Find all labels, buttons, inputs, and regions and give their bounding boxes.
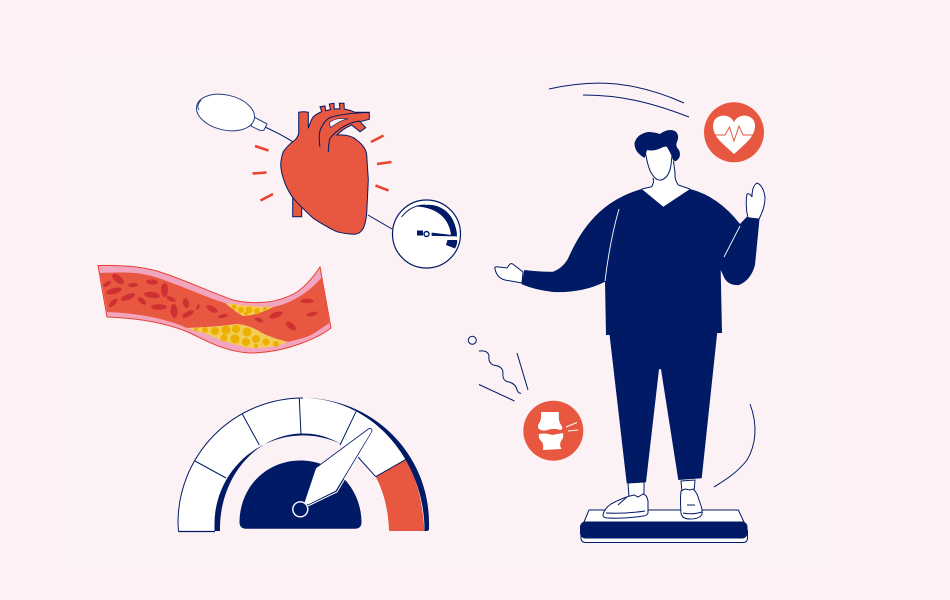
icon: heart rate badge (704, 102, 764, 162)
needle (293, 428, 372, 517)
background panel (67, 55, 833, 572)
sleeve highlights (605, 209, 619, 281)
person (495, 130, 765, 497)
trousers (609, 330, 718, 483)
motion arc near leg (714, 404, 755, 487)
artery illustration (98, 265, 331, 353)
upper plaque (225, 303, 273, 316)
motion lines near knee (468, 336, 528, 401)
neck and face (642, 152, 690, 207)
pulmonary artery edges (319, 112, 369, 147)
heart body and vessels (281, 103, 369, 234)
vessel wall (98, 265, 331, 353)
red blood cells (102, 272, 318, 332)
big risk gauge (178, 398, 429, 532)
motion lines above person (549, 83, 689, 117)
icon: pressure dial (368, 200, 460, 268)
lower plaque (187, 324, 288, 348)
ankles (628, 482, 644, 497)
gauge outline and bands (178, 398, 303, 532)
icon: heart (281, 103, 369, 234)
blood channel (100, 272, 329, 342)
hands (495, 264, 523, 283)
hair (634, 130, 680, 161)
heartbeat rays (252, 136, 392, 200)
red danger segment (376, 459, 424, 531)
shoes (603, 489, 702, 519)
fat cells (194, 304, 279, 348)
icon: pressure bulb (193, 89, 296, 144)
torso and arms (522, 189, 760, 335)
lower vessel (293, 196, 302, 217)
navy dial (240, 460, 362, 529)
gauge white scale (178, 398, 428, 532)
icon: joint badge (523, 401, 583, 461)
bathroom scale (580, 510, 748, 542)
gap under the arch (329, 118, 348, 128)
